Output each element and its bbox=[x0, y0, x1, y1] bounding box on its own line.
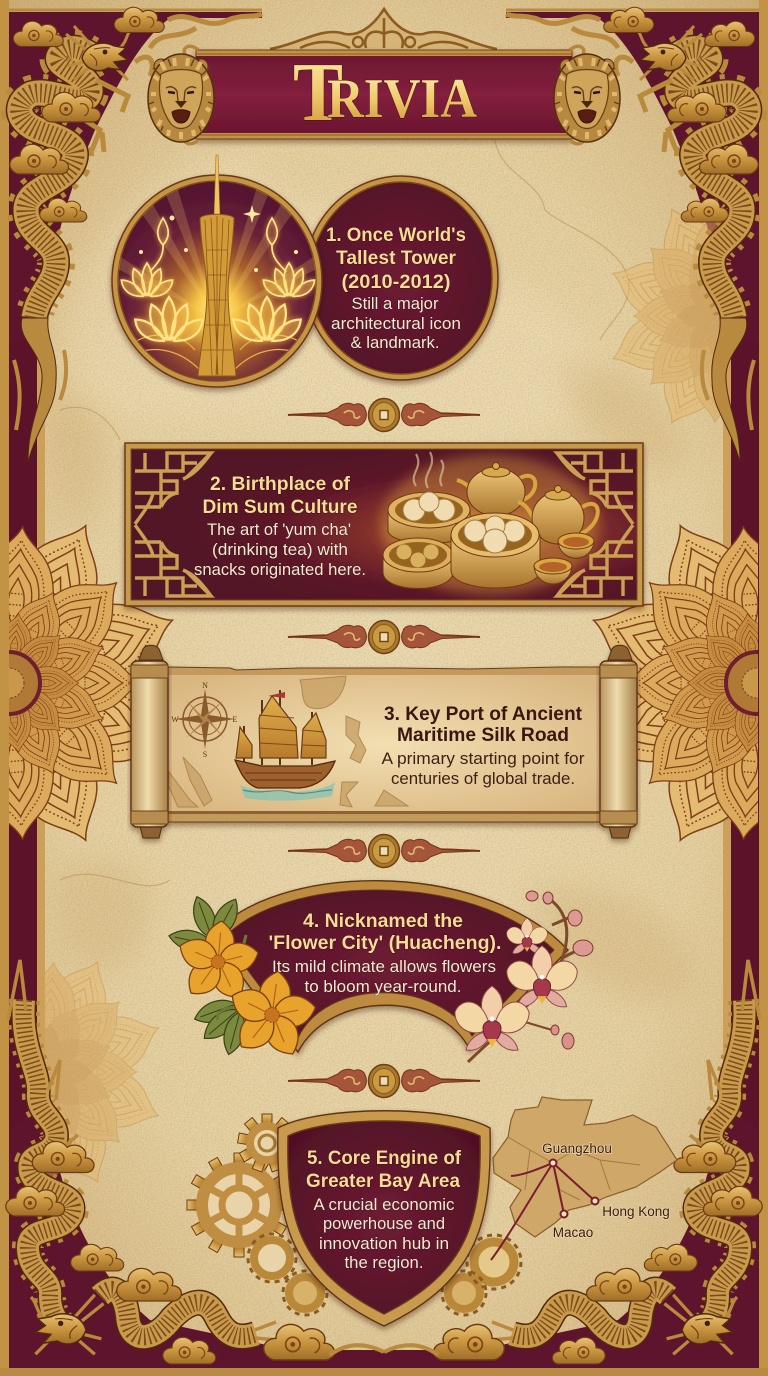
text 3 bbox=[382, 703, 585, 788]
divider 4 bbox=[288, 1064, 480, 1098]
title text: RIVIA bbox=[327, 68, 477, 130]
heading: Dim Sum Culture bbox=[202, 496, 358, 518]
heading bbox=[306, 1147, 461, 1192]
scroll roller left bbox=[131, 645, 168, 838]
heading bbox=[326, 224, 466, 293]
steamer small bbox=[383, 538, 453, 588]
map of bay area: Macao bbox=[553, 1225, 593, 1240]
lattice frame bbox=[125, 443, 643, 606]
compass rose: S bbox=[203, 750, 207, 759]
body: architectural icon bbox=[331, 314, 461, 333]
scroll roller right bbox=[600, 645, 637, 838]
body: Still a major bbox=[352, 294, 439, 313]
title text: T bbox=[293, 46, 343, 139]
tea cups bbox=[534, 533, 594, 584]
compass rose bbox=[171, 681, 238, 759]
title text bbox=[293, 46, 477, 139]
body bbox=[382, 749, 585, 788]
body: A crucial economic bbox=[314, 1195, 455, 1214]
body: (drinking tea) with bbox=[212, 540, 348, 559]
map land shapes bbox=[168, 676, 408, 807]
text 2 bbox=[194, 473, 366, 579]
body: innovation hub in bbox=[319, 1234, 449, 1253]
heading: 2. Birthplace of bbox=[210, 473, 350, 495]
body: to bloom year-round. bbox=[304, 977, 462, 996]
body: & landmark. bbox=[350, 333, 440, 352]
body: A primary starting point for bbox=[382, 749, 585, 768]
dragon: bottom right bbox=[384, 960, 762, 1364]
text 1 bbox=[326, 224, 466, 352]
mandala: upper right pale bbox=[612, 208, 722, 424]
lattice corners bbox=[135, 453, 211, 524]
big gear bbox=[187, 1153, 291, 1257]
orchids bbox=[455, 891, 593, 1062]
heading: (2010-2012) bbox=[342, 271, 450, 293]
dragon: bottom left bbox=[6, 960, 384, 1364]
banner curl ornaments bbox=[184, 46, 584, 144]
compass rose: E bbox=[233, 715, 238, 724]
compass rose: N bbox=[202, 681, 208, 690]
heading bbox=[268, 910, 502, 954]
light rays, stars, lotuses bbox=[118, 190, 316, 370]
body: the region. bbox=[344, 1253, 424, 1272]
body: Its mild climate allows flowers bbox=[272, 957, 496, 976]
body bbox=[194, 520, 366, 579]
heading: 3. Key Port of Ancient bbox=[384, 703, 582, 725]
lion right bbox=[554, 54, 620, 142]
dragon: top right bbox=[506, 7, 758, 462]
dragon: top left bbox=[10, 7, 262, 462]
panel 2: dim sum bbox=[125, 443, 643, 606]
shield bbox=[278, 1111, 490, 1326]
panel 1: once world's tallest tower bbox=[110, 155, 498, 387]
body bbox=[314, 1195, 455, 1272]
banner plate bbox=[196, 50, 572, 139]
upper small gear bbox=[238, 1114, 296, 1172]
gears bbox=[187, 1114, 521, 1315]
panel 5: greater bay area bbox=[187, 1097, 677, 1326]
divider 3 bbox=[288, 834, 480, 868]
compass rose: W bbox=[171, 715, 179, 724]
map of bay area bbox=[491, 1097, 677, 1260]
heading: 4. Nicknamed the bbox=[303, 910, 463, 932]
lower gears bbox=[248, 1234, 521, 1315]
text 4 bbox=[268, 910, 502, 996]
body: centuries of global trade. bbox=[391, 769, 575, 788]
heading: 'Flower City' (Huacheng). bbox=[268, 932, 502, 954]
steamer front bbox=[451, 513, 540, 588]
junk ship bbox=[235, 690, 335, 801]
teapot 2 bbox=[518, 486, 598, 544]
steamer back bbox=[388, 492, 470, 544]
teapot 1 bbox=[457, 462, 535, 516]
panel 4: flower city bbox=[167, 881, 593, 1066]
map of bay area: Hong Kong bbox=[602, 1204, 670, 1219]
map of bay area: Guangzhou bbox=[542, 1141, 612, 1156]
top center filigree bbox=[270, 9, 497, 49]
heading: 5. Core Engine of bbox=[307, 1147, 461, 1169]
heading: Maritime Silk Road bbox=[397, 724, 569, 746]
panel 3: silk road scroll bbox=[131, 645, 637, 838]
text 5 bbox=[306, 1147, 461, 1272]
orange flowers and leaves bbox=[167, 893, 324, 1066]
mandala: lower left pale bbox=[45, 960, 160, 1184]
title banner bbox=[148, 46, 620, 144]
body: The art of 'yum cha' bbox=[207, 520, 351, 539]
divider 1 bbox=[288, 398, 480, 432]
body bbox=[331, 294, 461, 352]
heading: Tallest Tower bbox=[336, 247, 456, 269]
body: powerhouse and bbox=[323, 1214, 445, 1233]
text disc bbox=[304, 176, 498, 380]
arched plate bbox=[212, 881, 568, 1052]
heading bbox=[202, 473, 358, 518]
body: snacks originated here. bbox=[194, 560, 366, 579]
lion left bbox=[148, 54, 214, 142]
mandala: right bold bbox=[592, 524, 758, 842]
divider 2 bbox=[288, 620, 480, 654]
mandala: left bold bbox=[9, 524, 174, 842]
canton tower icon bbox=[198, 155, 236, 376]
scroll paper bbox=[168, 667, 600, 822]
heading: 1. Once World's bbox=[326, 224, 466, 246]
body bbox=[272, 957, 496, 996]
dim sum and tea illustration bbox=[380, 452, 600, 595]
tower image disc bbox=[112, 175, 322, 387]
heading bbox=[384, 703, 582, 746]
heading: Greater Bay Area bbox=[306, 1170, 460, 1192]
